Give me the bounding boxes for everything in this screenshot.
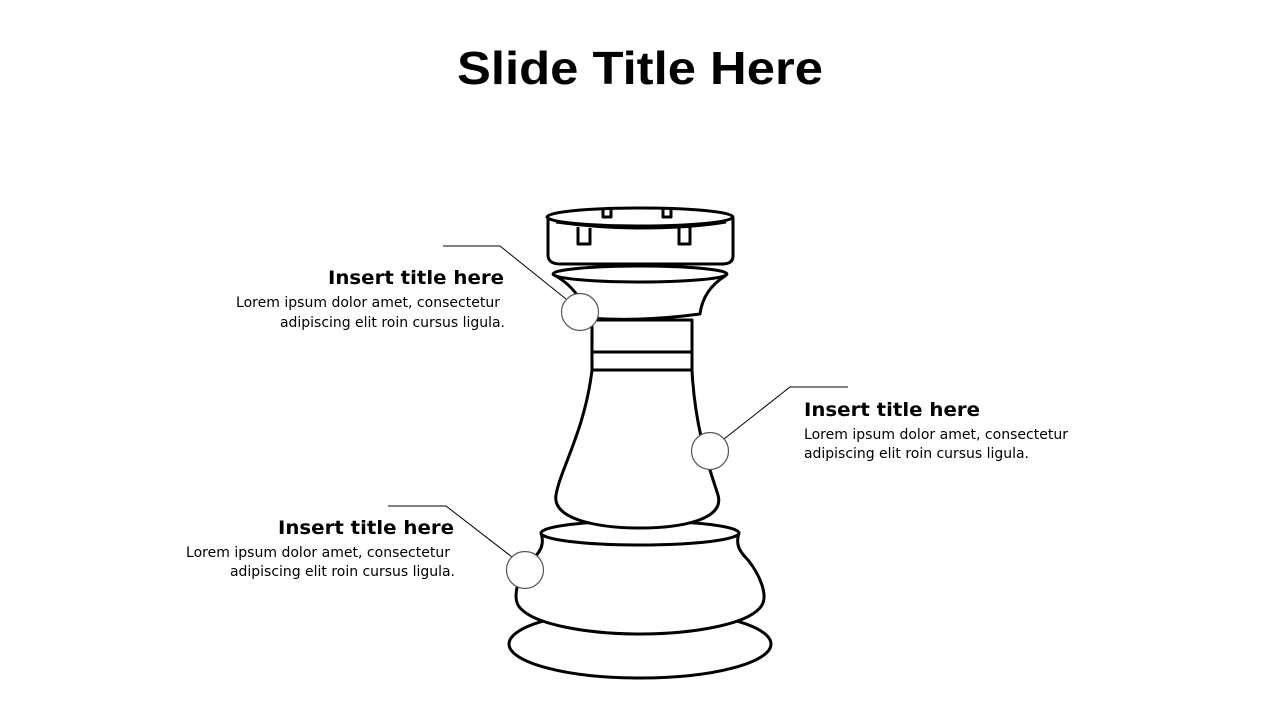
base: [516, 533, 764, 634]
foot: [509, 610, 771, 678]
callout 2: adipiscing elit roin cursus ligula.: [804, 446, 1029, 462]
callout 3: [186, 506, 544, 588]
callout 2: [692, 387, 1068, 470]
title: Slide Title Here: [457, 42, 823, 94]
crown: [548, 218, 733, 264]
callout 1: Lorem ipsum dolor amet, consectetur: [236, 295, 500, 311]
callout 3: Insert title here: [278, 517, 454, 539]
callout 1: Insert title here: [328, 267, 504, 289]
callout 3: Lorem ipsum dolor amet, consectetur: [186, 545, 450, 561]
callout 1: [236, 246, 598, 331]
neck bands: [592, 320, 692, 370]
callout 1: adipiscing elit roin cursus ligula.: [280, 315, 505, 331]
callout 2: Lorem ipsum dolor amet, consectetur: [804, 427, 1068, 443]
callout 3: adipiscing elit roin cursus ligula.: [230, 564, 455, 580]
body: [556, 370, 719, 528]
collar flare: [556, 276, 725, 319]
rook illustration: [509, 208, 771, 678]
callout 2: Insert title here: [804, 399, 980, 421]
